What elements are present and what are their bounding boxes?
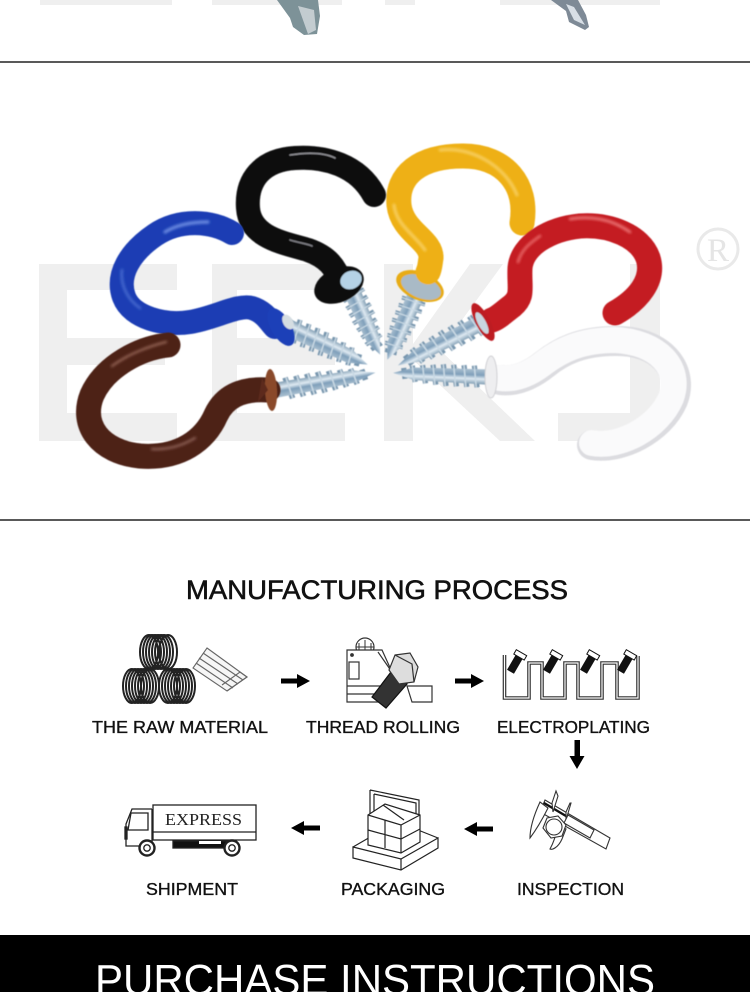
label: packaging: PACKAGING — [341, 879, 445, 899]
blue hook — [122, 222, 300, 350]
icon: raw material — [123, 635, 247, 703]
label: inspection: INSPECTION — [517, 879, 624, 899]
icon: vernier caliper inspecting nut — [530, 791, 610, 849]
icon: thread rolling — [347, 638, 432, 708]
yellow hook — [392, 149, 523, 308]
icon: express truck — [125, 805, 256, 856]
top photo remainder: watermark strip and screw tips — [40, 0, 660, 35]
label: shipment: SHIPMENT — [146, 879, 238, 899]
watermark letters: R — [707, 233, 729, 269]
title: manufacturing process: MANUFACTURING PROCESS — [186, 575, 568, 605]
black hook — [248, 153, 374, 311]
arrow — [291, 821, 320, 835]
label: thread rolling: THREAD ROLLING — [306, 717, 460, 737]
arrow — [281, 674, 310, 688]
panel: photo of coloured cup hooks — [39, 149, 738, 456]
white hook — [485, 340, 676, 446]
red hook — [467, 218, 650, 344]
divider line — [0, 519, 750, 521]
icon: electroplating — [504, 650, 638, 698]
brown hook — [89, 342, 278, 456]
screws — [275, 282, 492, 401]
arrow — [455, 674, 484, 688]
icon: packaging — [353, 790, 438, 870]
divider line — [0, 61, 750, 63]
footer banner: purchase instructions — [0, 935, 750, 992]
label: electroplating: ELECTROPLATING — [497, 717, 650, 737]
arrow — [464, 822, 493, 836]
watermark letters — [39, 229, 738, 441]
arrow down — [570, 740, 584, 769]
icon: express truck: EXPRESS — [165, 810, 242, 829]
label: the raw material: THE RAW MATERIAL — [92, 717, 268, 737]
